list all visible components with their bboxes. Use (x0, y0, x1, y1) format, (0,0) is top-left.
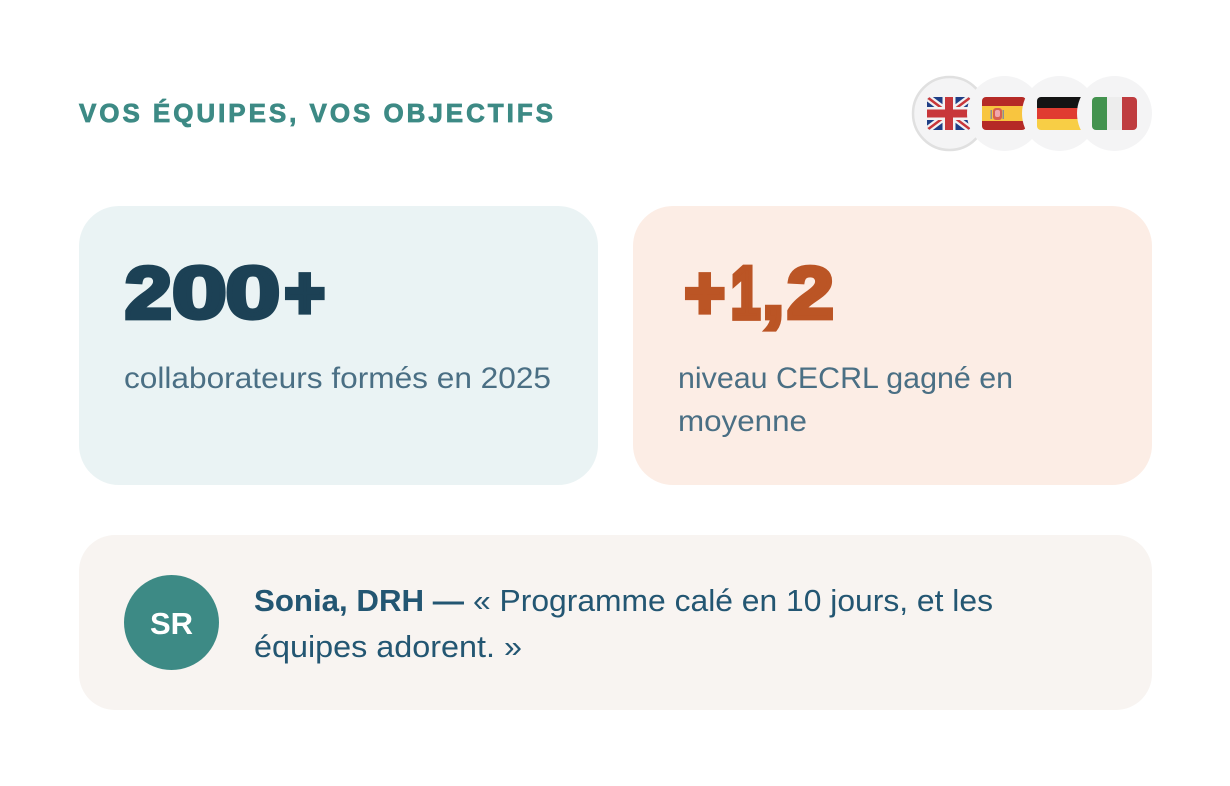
icon: Spain flag (967, 76, 1042, 151)
stat number: 2 (125, 252, 172, 334)
stat description: niveau CECRL gagné en (678, 362, 1013, 395)
stat description: moyenne (678, 405, 807, 438)
quote (254, 583, 993, 664)
icon: UK flag (913, 77, 986, 150)
icon: Italy flag (1077, 76, 1152, 151)
quote: Sonia, DRH — (254, 583, 464, 618)
stat number: , (762, 253, 784, 334)
quote: équipes adorent. » (254, 629, 522, 664)
title: VOS ÉQUIPES, VOS OBJECTIFS (79, 98, 553, 128)
stat number: 0 (172, 252, 227, 334)
panel: testimonial (79, 535, 1152, 710)
stat description (678, 362, 1013, 438)
stat number: 0 (226, 252, 280, 334)
language flags (913, 76, 1152, 151)
quote: « Programme calé en 10 jours, et les (473, 583, 993, 618)
avatar (124, 575, 219, 670)
avatar: SR (150, 606, 193, 641)
stat number: 2 (787, 252, 834, 334)
panel: stat +1,2 (633, 206, 1152, 485)
stat number (125, 252, 325, 334)
stat description: collaborateurs formés en 2025 (124, 362, 551, 395)
stat number: + (284, 253, 325, 334)
icon: Germany flag (1022, 76, 1097, 151)
panel: stat 200+ (79, 206, 598, 485)
stat number (684, 252, 834, 334)
stat number: 1 (731, 253, 760, 334)
stat number: + (684, 253, 725, 334)
